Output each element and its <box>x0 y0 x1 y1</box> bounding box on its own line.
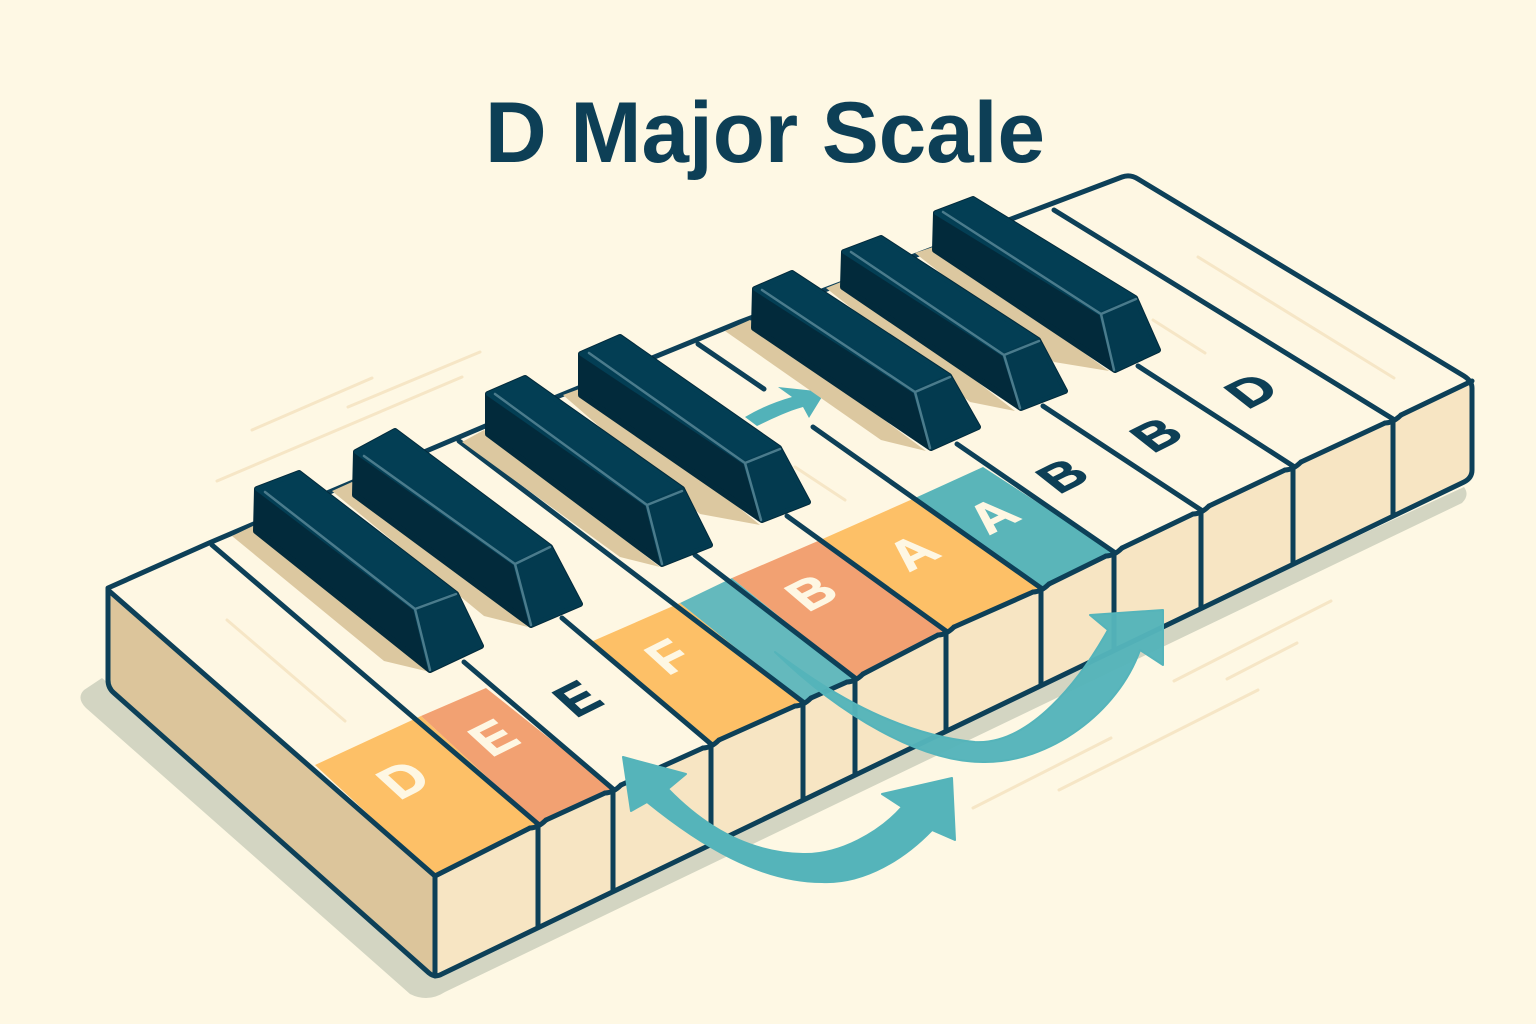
black key 7 <box>935 199 1158 370</box>
motion lines <box>217 352 1331 808</box>
label D navy: D <box>1212 365 1291 416</box>
double-headed teal arrow lower <box>623 757 955 882</box>
colored band: E <box>421 688 613 824</box>
title: D Major Scale <box>485 85 1045 181</box>
colored band: teal <box>680 578 855 702</box>
label D orange: D <box>365 752 443 808</box>
label B navy 2: B <box>1118 409 1195 460</box>
label B salmon: B <box>773 566 850 619</box>
label E navy: E <box>541 671 614 726</box>
black key shadows <box>232 246 1109 672</box>
black key 6 <box>843 238 1065 408</box>
top surface <box>108 174 1472 876</box>
colored band: A <box>818 498 1041 631</box>
label B navy: B <box>1024 450 1101 501</box>
small arrow <box>745 387 825 426</box>
black key 5 <box>754 273 978 448</box>
black key 1 <box>256 473 481 670</box>
colored band: A teal <box>915 467 1114 588</box>
keyboard shadow <box>80 487 1467 998</box>
label E salmon: E <box>457 711 531 766</box>
letter labels on keys <box>365 365 1291 808</box>
large teal arrow upper <box>775 610 1163 762</box>
colored band: B <box>732 541 946 678</box>
faint key marks <box>227 257 1394 721</box>
colored band: F <box>593 603 803 744</box>
front face <box>435 381 1472 976</box>
black key 2 <box>355 431 580 625</box>
label F orange: F <box>634 630 705 684</box>
label A teal: A <box>954 489 1031 542</box>
keyboard body <box>108 174 1472 976</box>
key dividers and outlines <box>108 176 1472 976</box>
left side face <box>108 588 435 976</box>
black key 3 <box>488 378 710 564</box>
colored band: D <box>315 716 538 876</box>
black keys <box>256 199 1158 670</box>
black key 4 <box>581 337 808 520</box>
label A orange: A <box>874 526 951 579</box>
